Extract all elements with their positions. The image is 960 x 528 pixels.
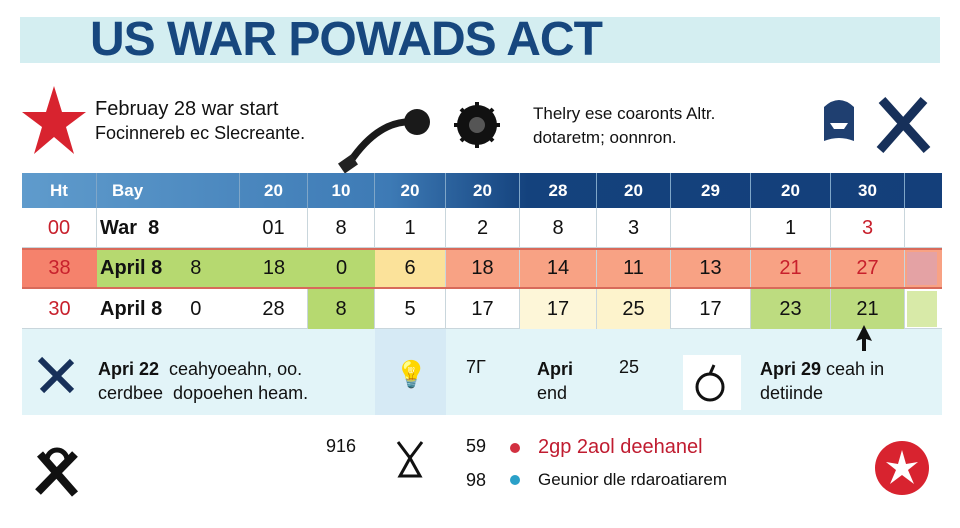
- row 3: 30: [48, 298, 71, 320]
- text: description: [533, 104, 715, 147]
- table header: 20: [473, 180, 492, 200]
- row 1: 01: [262, 216, 285, 238]
- title: US WAR POWADS ACT: [90, 13, 602, 66]
- table header: 28: [549, 180, 567, 200]
- text: war start: Februay 28 war start: [95, 98, 278, 120]
- row 3: 17: [699, 298, 722, 320]
- table header: Ht: [50, 180, 68, 200]
- row 2: 21: [779, 257, 802, 279]
- row 1: 8: [335, 216, 347, 238]
- row 1: 3: [628, 216, 639, 238]
- row 3: 17: [547, 298, 569, 320]
- row 1: 1: [404, 216, 416, 238]
- row 2: 14: [547, 257, 569, 279]
- row 2: April 8: [100, 257, 162, 279]
- legend: 2gp 2aol deehanel: [538, 436, 703, 458]
- row 3: 21: [856, 298, 879, 320]
- table header: 30: [858, 180, 877, 200]
- icon: burst: [454, 102, 500, 148]
- arrow: [856, 325, 872, 351]
- row 3: April 8: [100, 298, 162, 320]
- icon: bottom left tools: [35, 448, 78, 497]
- row 1: [22, 208, 942, 248]
- row 2: 6: [404, 257, 416, 279]
- icon: red star: [22, 86, 86, 154]
- row 2: 13: [699, 257, 722, 279]
- legend: 59: [466, 436, 486, 456]
- legend: 916: [326, 436, 356, 456]
- bottom row: Apri: [537, 359, 573, 379]
- row 1: 1: [785, 216, 796, 238]
- row 3: 0: [190, 298, 201, 320]
- bottom row: Apri 29 ceah in: [760, 359, 884, 379]
- icon: crossed arrow: [38, 356, 74, 394]
- icon: microphone: [338, 109, 430, 173]
- bottom row: 7Γ: [466, 357, 486, 377]
- row 2: 8: [190, 257, 201, 279]
- row 2: 38: [48, 257, 71, 279]
- icon: bomb: [696, 364, 724, 402]
- row 3: 25: [622, 298, 645, 320]
- row 1: 8: [552, 216, 564, 238]
- row 1: 2: [477, 216, 488, 238]
- row 2: 0: [336, 257, 347, 279]
- table header: 20: [264, 180, 283, 200]
- row 2: 27: [856, 257, 879, 279]
- table header: 10: [332, 180, 350, 200]
- text: war start: Focinnereb ec Slecreante.: [95, 123, 305, 143]
- row 2: 18: [263, 257, 285, 279]
- row 3: 28: [262, 298, 285, 320]
- title band: [20, 17, 940, 63]
- bottom row: detiinde: [760, 383, 823, 403]
- table header: Bay: [112, 180, 143, 200]
- table header: [22, 173, 942, 208]
- text: description: dotaretm; oonnron.: [533, 128, 677, 147]
- row 1: 00: [48, 216, 70, 238]
- icon: crossed tools: [876, 97, 930, 153]
- bottom row: [22, 329, 942, 415]
- row 3: 17: [471, 298, 494, 320]
- row 3: [22, 289, 942, 329]
- legend: [326, 436, 727, 490]
- row 2: 18: [471, 257, 494, 279]
- table header: 20: [781, 180, 800, 200]
- table header: 29: [701, 180, 720, 200]
- text: description: Thelry ese coaronts Altr.: [533, 104, 715, 123]
- table header: 20: [401, 180, 419, 200]
- row 1: 3: [862, 216, 873, 238]
- legend: Geunior dle rdaroatiarem: [538, 470, 727, 489]
- icon: bulb: 💡: [395, 359, 427, 389]
- icon: red circle badge: [875, 441, 929, 495]
- row 3: 8: [335, 298, 347, 320]
- row 1: War 8: [100, 216, 159, 238]
- table: [22, 173, 942, 415]
- row 3: 5: [404, 298, 416, 320]
- row 2: [22, 248, 942, 289]
- row 2: 11: [623, 257, 644, 279]
- icon: shield: [824, 100, 854, 141]
- bottom row: cerdbee dopoehen heam.: [98, 383, 308, 403]
- bottom row: Apri 22 ceahyoeahn, oo.: [98, 359, 302, 379]
- bottom row: end: [537, 383, 567, 403]
- text: war start: [95, 98, 305, 143]
- table header: 20: [624, 180, 643, 200]
- row 3: 23: [779, 298, 802, 320]
- legend: 98: [466, 470, 486, 490]
- bottom row: 25: [619, 357, 639, 377]
